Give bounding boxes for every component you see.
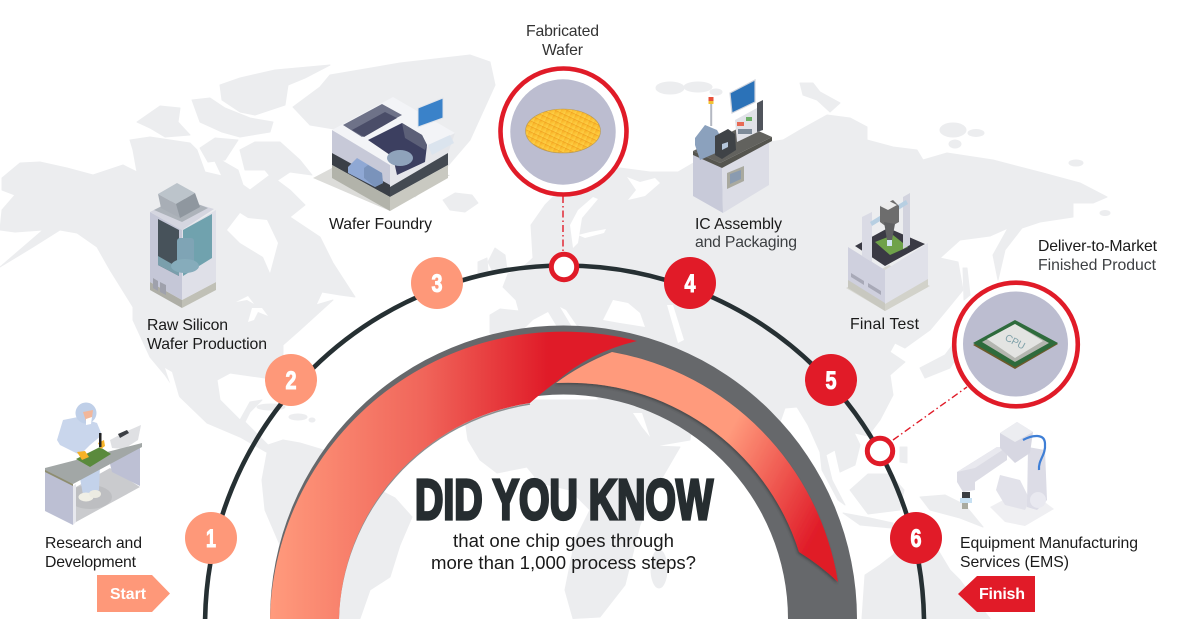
heading: did you know: DID YOU KNOW bbox=[415, 468, 713, 532]
step 3 marker: 3 bbox=[432, 270, 442, 298]
label: wafer foundry: Wafer Foundry bbox=[329, 216, 432, 233]
step 5 marker: 5 bbox=[826, 367, 837, 395]
label: fabricated wafer: Wafer bbox=[542, 42, 583, 59]
label: IC assembly and packaging bbox=[695, 216, 797, 251]
label: raw silicon wafer production bbox=[147, 317, 267, 353]
connector: CPU to arc bbox=[893, 387, 967, 440]
dark process arc bbox=[205, 265, 924, 619]
step 1 marker bbox=[185, 512, 237, 564]
step 5 marker bbox=[805, 354, 857, 406]
finish arrow: Finish bbox=[979, 586, 1025, 603]
subheading: more than 1,000 process steps? bbox=[431, 552, 696, 573]
icon: CPU callout bbox=[954, 283, 1078, 406]
label: raw silicon wafer production: Raw Silicon bbox=[147, 317, 228, 334]
label: raw silicon wafer production: Wafer Production bbox=[147, 336, 267, 353]
big arch: grey ring bbox=[270, 325, 857, 619]
marker: finished product node bbox=[867, 438, 893, 464]
step 6 marker: 6 bbox=[910, 525, 922, 553]
icon: final test machine bbox=[846, 193, 930, 311]
big arch: inner edge shadow bbox=[338, 404, 530, 619]
subheading bbox=[431, 530, 696, 573]
subheading: that one chip goes through bbox=[453, 530, 674, 551]
icon: silicon crystal puller bbox=[150, 183, 216, 308]
label: deliver-to-market finished product bbox=[1038, 238, 1158, 274]
step 2 marker bbox=[265, 354, 317, 406]
step 4 marker: 4 bbox=[684, 270, 696, 298]
label: deliver-to-market finished product: Deliver-to-Market bbox=[1038, 238, 1158, 255]
start arrow bbox=[97, 575, 170, 612]
step 4 marker bbox=[664, 257, 716, 309]
icon: fabricated wafer callout bbox=[500, 68, 626, 194]
connector: wafer to arc bbox=[562, 196, 564, 254]
icon: CPU callout: CPU bbox=[1003, 333, 1027, 352]
marker: wafer node bbox=[551, 254, 577, 280]
big arch: red sweep bbox=[270, 332, 637, 619]
label: fabricated wafer: Fabricated bbox=[526, 23, 599, 40]
label: equipment manufacturing services: Services (EMS) bbox=[960, 554, 1069, 571]
label: equipment manufacturing services: Equipment Manufacturing bbox=[960, 535, 1138, 552]
label: IC assembly and packaging: IC Assembly bbox=[695, 216, 782, 233]
icon: wafer foundry machine bbox=[313, 97, 455, 211]
label: deliver-to-market finished product: Finished Product bbox=[1038, 257, 1157, 274]
label: research and development: Development bbox=[45, 554, 137, 571]
finish arrow bbox=[958, 576, 1035, 612]
icon: IC assembly machine bbox=[693, 80, 772, 213]
label: final test: Final Test bbox=[850, 316, 920, 333]
step 3 marker bbox=[411, 257, 463, 309]
label: IC assembly and packaging: and Packaging bbox=[695, 234, 797, 251]
step 1 marker: 1 bbox=[206, 525, 216, 553]
step 6 marker bbox=[890, 512, 942, 564]
step 2 marker: 2 bbox=[286, 367, 296, 395]
label: equipment manufacturing services bbox=[960, 535, 1138, 571]
big arch: salmon ribbon with arrow tip bbox=[556, 352, 838, 582]
icon: robot arm bbox=[957, 422, 1054, 526]
start arrow: Start bbox=[110, 586, 147, 603]
label: research and development: Research and bbox=[45, 535, 142, 552]
label: fabricated wafer bbox=[526, 23, 599, 59]
icon: researcher at desk bbox=[45, 402, 142, 525]
label: research and development bbox=[45, 535, 142, 571]
